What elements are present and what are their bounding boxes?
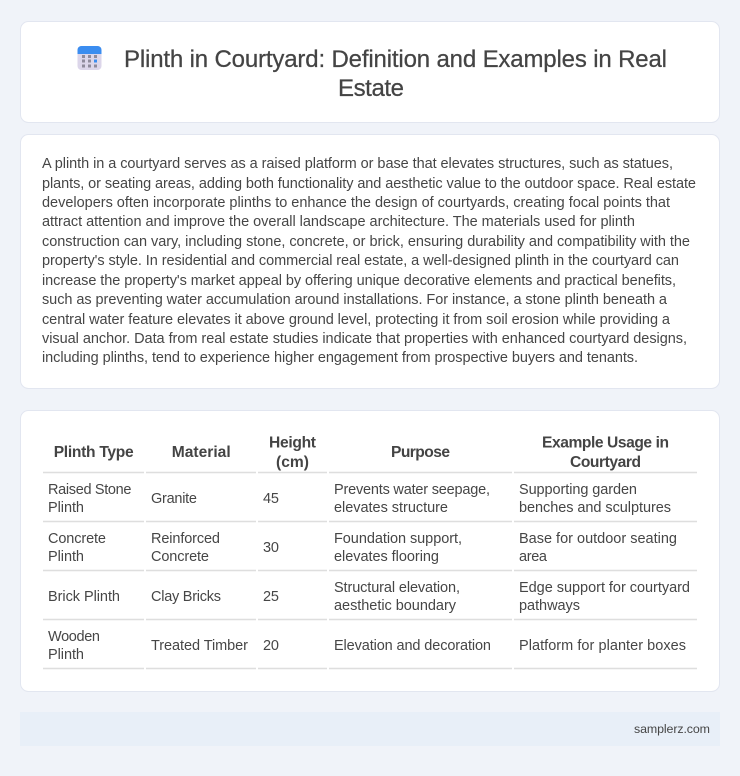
- table header row: Material: [172, 444, 231, 461]
- table row: concrete plinth: Plinth: [48, 549, 84, 565]
- table row: brick plinth: [48, 580, 690, 614]
- table row: wooden plinth: 20: [263, 638, 279, 654]
- table row: raised stone plinth: Granite: [151, 491, 197, 507]
- table row: brick plinth: Brick Plinth: [48, 589, 120, 605]
- table header row: Purpose: [391, 444, 450, 461]
- table row: raised stone plinth: [48, 482, 671, 516]
- table row: wooden plinth: [48, 629, 686, 663]
- table row: brick plinth: aesthetic boundary: [334, 598, 457, 614]
- table row: wooden plinth: Elevation and decoration: [334, 638, 491, 654]
- table row: raised stone plinth: Prevents water seepage,: [334, 482, 490, 498]
- table row: raised stone plinth: benches and sculptures: [519, 500, 671, 516]
- table row: raised stone plinth: Raised Stone: [48, 482, 132, 498]
- text block: description paragraph: including plinths, tend to experience higher engagement from prospective buyers and tenants.: [42, 350, 638, 366]
- panel: table: [20, 410, 720, 692]
- text block: description paragraph: attract attention and improve the overall landscape architecture. The materials used for plinth: [42, 214, 635, 230]
- table row: brick plinth: pathways: [519, 598, 580, 614]
- table header row: Courtyard: [570, 454, 641, 471]
- text block: description paragraph: visual anchor. Data from real estate studies indicate that properties with enhanced courtyard designs,: [42, 331, 687, 347]
- table row: concrete plinth: Foundation support,: [334, 531, 462, 547]
- table row: concrete plinth: Reinforced: [151, 531, 220, 547]
- table header row: (cm): [276, 454, 309, 471]
- table row: wooden plinth: Treated Timber: [151, 638, 248, 654]
- table row: concrete plinth: [48, 531, 677, 565]
- table header row: Plinth Type: [54, 444, 134, 461]
- footer: samplerz.com: [634, 722, 710, 736]
- text block: description paragraph: central water feature elevates it above ground level, protecting it from soil erosion while providing a: [42, 312, 671, 328]
- title: Plinth in Courtyard: Definition and Examples in Real: [124, 46, 667, 73]
- table row: wooden plinth: Platform for planter boxes: [519, 638, 686, 654]
- table header row: Height: [269, 434, 316, 452]
- table row: concrete plinth: elevates flooring: [334, 549, 439, 565]
- footer: [20, 712, 720, 746]
- title: [124, 46, 667, 102]
- icon: calendar: [78, 46, 102, 70]
- text block: description paragraph: developers often incorporate plinths to enhance the design of courtyards, creating focal points that: [42, 195, 670, 211]
- table row: raised stone plinth: 45: [263, 491, 279, 507]
- panel: description: [20, 134, 720, 388]
- table row: brick plinth: Clay Bricks: [151, 589, 221, 605]
- table row: raised stone plinth: Supporting garden: [519, 482, 637, 498]
- text block: description paragraph: [42, 156, 696, 366]
- table row: concrete plinth: Base for outdoor seating: [519, 531, 677, 547]
- table row: raised stone plinth: elevates structure: [334, 500, 448, 516]
- table row: brick plinth: Edge support for courtyard: [519, 580, 690, 596]
- panel: header: [20, 22, 720, 122]
- text block: description paragraph: property's style. In residential and commercial real estate, a well-designed plinth in the courtyard can: [42, 253, 679, 269]
- text block: description paragraph: increase the property's market appeal by offering unique decorative elements and practical benefits,: [42, 273, 676, 289]
- table row: wooden plinth: Plinth: [48, 647, 84, 663]
- table row: concrete plinth: area: [519, 549, 548, 565]
- text block: description paragraph: A plinth in a courtyard serves as a raised platform or base that elevates structures, such as statues,: [42, 156, 673, 172]
- table header row: [54, 434, 669, 471]
- table row: brick plinth: 25: [263, 589, 279, 605]
- table row: concrete plinth: Concrete: [48, 531, 106, 547]
- table row: brick plinth: Structural elevation,: [334, 580, 460, 596]
- table header row: Example Usage in: [542, 434, 669, 452]
- table row: concrete plinth: 30: [263, 540, 279, 556]
- table row: wooden plinth: Wooden: [48, 629, 100, 645]
- text block: description paragraph: plants, or seating areas, adding both functionality and aesthetic value to the outdoor space. Real estate: [42, 176, 696, 192]
- text block: description paragraph: construction can vary, including stone, concrete, or brick, ensuring durability and compatibility with the: [42, 234, 690, 250]
- title: Estate: [338, 75, 404, 102]
- text block: description paragraph: such as preventing water accumulation around installations. For instance, a stone plinth beneath a: [42, 292, 668, 308]
- table row: raised stone plinth: Plinth: [48, 500, 84, 516]
- table row: concrete plinth: Concrete: [151, 549, 209, 565]
